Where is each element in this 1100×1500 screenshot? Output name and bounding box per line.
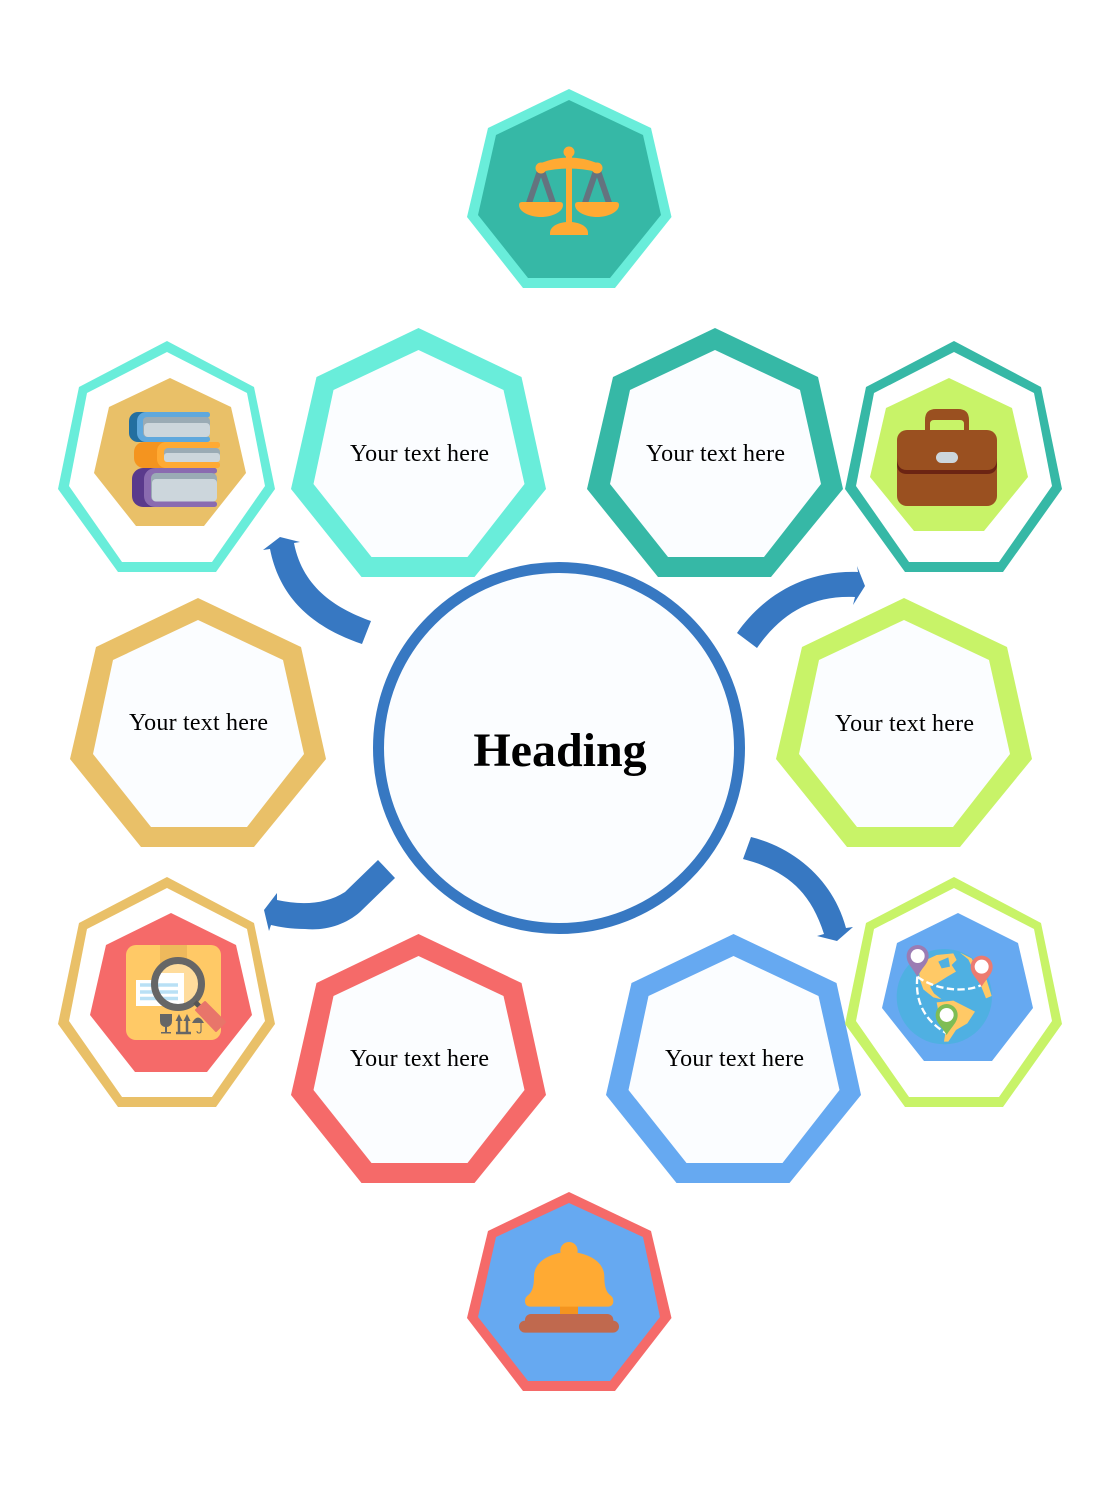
- text panel: left tan: [70, 598, 326, 847]
- icon: stack of books: [129, 412, 220, 507]
- icon panel: scales: [467, 89, 672, 288]
- text panel: top right dark teal: [587, 328, 843, 577]
- arrow: top right: [737, 566, 865, 648]
- icon panel: books: [58, 341, 275, 572]
- icon panel: package inspection: [58, 877, 275, 1107]
- arrow: bottom right: [743, 837, 853, 941]
- icon: globe with map pins: [897, 945, 993, 1044]
- icon panel: briefcase: [845, 341, 1062, 572]
- text panel: bottom left red: [291, 934, 546, 1183]
- text panel: top left teal: [291, 328, 546, 577]
- icon: magnifier over box: [126, 945, 225, 1040]
- text panel: right lime: [776, 598, 1032, 847]
- icon: service bell: [519, 1242, 619, 1333]
- text panel: bottom right blue: [606, 934, 861, 1183]
- text panel: left tan: Your text here: [129, 710, 268, 736]
- arrow: top left: [263, 537, 371, 644]
- icon panel: globe: [845, 877, 1062, 1107]
- icon panel: bell: [467, 1192, 672, 1391]
- text panel: top left teal: Your text here: [350, 441, 489, 467]
- text panel: bottom left red: Your text here: [350, 1046, 489, 1072]
- icon: briefcase: [897, 409, 997, 506]
- icon: balance scales: [519, 146, 619, 235]
- text panel: bottom right blue: Your text here: [665, 1046, 804, 1072]
- arrow: bottom left: [264, 860, 395, 931]
- text panel: top right dark teal: Your text here: [646, 441, 785, 467]
- text panel: right lime: Your text here: [835, 711, 974, 737]
- heading: Heading: [473, 724, 647, 777]
- central circle with heading: [378, 568, 740, 928]
